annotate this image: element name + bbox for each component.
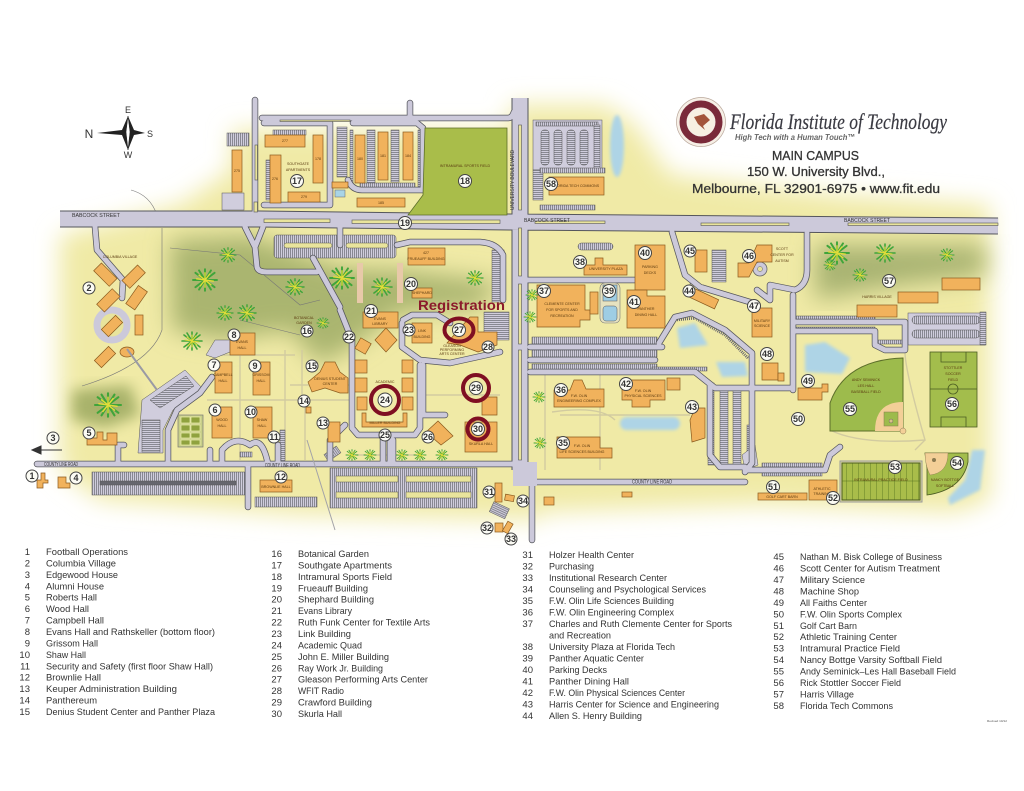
numbered building markers: 14 <box>299 396 309 406</box>
address block: Melbourne, FL 32901-6975 • www.fit.edu <box>692 181 940 196</box>
legend column 3: and Recreation <box>549 630 611 642</box>
legend column 1: 1 <box>25 547 30 558</box>
compass rose: S <box>147 129 153 139</box>
legend column 2: Crawford Building <box>298 698 372 709</box>
numbered building markers: 38 <box>575 257 585 267</box>
legend column 1: 12 <box>19 673 30 684</box>
numbered building markers: 10 <box>246 407 256 417</box>
numbered building markers: 39 <box>604 286 614 296</box>
building and field labels: SHAW <box>257 418 268 422</box>
building and field labels: LIFE SCIENCES BUILDING <box>560 450 605 454</box>
legend column 3: Allen S. Henry Building <box>549 711 642 722</box>
numbered building markers: 45 <box>685 246 695 256</box>
institute name heading: Florida Institute of Technology <box>729 109 947 134</box>
building and field labels: LIBRARY <box>372 322 388 326</box>
legend column 3: 35 <box>522 596 533 607</box>
building and field labels: MILITARY <box>754 319 771 323</box>
legend column 2: 27 <box>271 675 282 686</box>
legend column 2 <box>271 549 430 720</box>
numbered building markers: 36 <box>556 385 566 395</box>
legend column 1: 6 <box>25 604 30 615</box>
legend column 3: 37 <box>522 619 533 630</box>
legend column 2: Link Building <box>298 629 351 640</box>
building and field labels: F.W. OLIN <box>571 394 588 398</box>
legend column 4: Scott Center for Autism Treatment <box>800 564 940 574</box>
numbered building markers: 20 <box>406 279 416 289</box>
numbered building markers: 48 <box>762 349 772 359</box>
numbered building markers: 5 <box>86 428 92 438</box>
street labels: BABCOCK STREET <box>844 218 890 224</box>
building and field labels: HARRIS VILLAGE <box>862 295 892 299</box>
building and field labels: DECKS <box>644 271 657 275</box>
building and field labels: 178 <box>315 157 321 161</box>
numbered building markers: 17 <box>292 176 302 186</box>
building and field labels: HALL <box>238 346 246 350</box>
legend column 1: 13 <box>19 684 30 695</box>
numbered building markers: 33 <box>506 534 516 544</box>
legend column 3: Holzer Health Center <box>549 550 634 561</box>
numbered building markers: 27 <box>454 325 464 335</box>
numbered building markers: 32 <box>482 523 492 533</box>
legend column 1: Keuper Administration Building <box>46 684 177 695</box>
legend column 1: Panthereum <box>46 696 97 707</box>
legend column 2: John E. Miller Building <box>298 652 389 663</box>
legend column 1: Wood Hall <box>46 604 89 615</box>
numbered building markers: 28 <box>483 342 493 352</box>
building and field labels: F.W. OLIN <box>574 444 591 448</box>
legend column 1: 14 <box>19 696 30 707</box>
legend column 4: Rick Stottler Soccer Field <box>800 678 901 689</box>
numbered building markers: 16 <box>302 326 312 336</box>
numbered building markers: 53 <box>890 462 900 472</box>
legend column 2: Skurla Hall <box>298 709 342 720</box>
building and field labels: SOCCER <box>945 372 961 376</box>
building and field labels: PANTHER <box>638 307 655 311</box>
legend column 3: 36 <box>522 608 533 618</box>
numbered building markers: 1 <box>29 471 35 481</box>
numbered building markers: 4 <box>73 473 79 483</box>
legend column 3: 41 <box>522 676 533 688</box>
building and field labels: F.W. OLIN <box>635 389 652 393</box>
road network <box>37 98 998 540</box>
building and field labels: EVANS <box>374 317 387 321</box>
legend column 4: 49 <box>773 598 784 609</box>
numbered building markers: 50 <box>793 414 803 424</box>
building and field labels <box>103 139 963 499</box>
building and field labels: LES HALL <box>858 384 874 388</box>
numbered building markers: 26 <box>423 432 433 442</box>
print code footnote: Revised 10/12 <box>987 719 1007 723</box>
legend column 2: 28 <box>271 686 282 697</box>
tennis courts <box>178 415 203 447</box>
building and field labels: UNIVERSITY PLAZA <box>589 267 624 271</box>
building and field labels: 275 <box>234 169 240 173</box>
legend column 3: 31 <box>522 550 533 561</box>
legend column 2: 19 <box>271 583 282 594</box>
legend column 1: 11 <box>20 661 30 672</box>
registration label: Registration <box>418 298 505 313</box>
building and field labels: EVANS <box>236 340 249 344</box>
numbered building markers: 49 <box>803 376 813 386</box>
sports fields <box>178 128 977 502</box>
legend column 3: 39 <box>522 654 533 664</box>
legend column 2: Academic Quad <box>298 640 362 651</box>
building and field labels: CENTER <box>323 382 338 386</box>
numbered building markers: 9 <box>252 361 258 371</box>
building and field labels: ANDY SEMINICK <box>852 378 881 382</box>
legend column 4: Florida Tech Commons <box>800 701 893 712</box>
building and field labels: GRISSOM <box>253 373 269 377</box>
legend column 4: 53 <box>773 644 784 655</box>
legend column 1: Roberts Hall <box>46 593 97 604</box>
legend column 3: 33 <box>522 573 533 584</box>
building and field labels: INTRAMURAL PRACTICE FIELD <box>854 478 908 482</box>
building and field labels: 185 <box>378 201 384 205</box>
building and field labels: BASEBALL FIELD <box>851 390 881 394</box>
legend column 3: 34 <box>522 584 533 596</box>
building and field labels: 277 <box>282 139 288 143</box>
legend column 3: 44 <box>522 711 533 722</box>
numbered building markers: 40 <box>640 248 650 258</box>
walkways <box>207 350 925 470</box>
building and field labels: HALL <box>258 424 266 428</box>
building and field labels: FIELD <box>948 378 958 382</box>
legend column 1: Denius Student Center and Panther Plaza <box>46 707 216 718</box>
compass rose <box>85 105 153 160</box>
legend column 1: 15 <box>19 707 30 718</box>
street labels: COUNTY LINE ROAD <box>632 480 672 486</box>
numbered building markers: 43 <box>687 402 697 412</box>
numbered building markers: 42 <box>621 379 631 389</box>
legend column 4: Golf Cart Barn <box>800 621 857 632</box>
field 54 softball <box>925 453 968 495</box>
legend column 1: 5 <box>25 593 30 604</box>
legend column 1: Shaw Hall <box>46 650 86 661</box>
legend column 4: Nancy Bottge Varsity Softball Field <box>800 655 942 666</box>
compass rose: W <box>124 150 133 160</box>
numbered building markers: 24 <box>380 395 390 405</box>
numbered building markers: 8 <box>231 330 237 340</box>
legend column 2: 16 <box>271 549 282 560</box>
legend column 2: Ray Work Jr. Building <box>298 663 383 674</box>
arrow: to Edgewood House <box>32 446 62 454</box>
compass rose: N <box>85 127 93 141</box>
legend column 2: 23 <box>271 629 282 640</box>
legend column 3: Purchasing <box>549 562 594 572</box>
legend column 4: All Faiths Center <box>800 598 867 609</box>
legend column 1: 10 <box>19 650 30 661</box>
legend column 4: Military Science <box>800 575 865 586</box>
building and field labels: NANCY BOTTGE <box>931 478 960 482</box>
field 55 baseball <box>830 358 906 434</box>
building and field labels: CAMPBELL <box>213 373 233 377</box>
terrain background <box>60 105 990 520</box>
numbered building markers: 58 <box>546 179 556 189</box>
campus walking paths <box>127 263 403 530</box>
legend column 4: Intramural Practice Field <box>800 644 900 655</box>
building and field labels: 181 <box>380 154 386 158</box>
numbered building markers: 34 <box>518 496 528 506</box>
address block: 150 W. University Blvd., <box>747 164 885 179</box>
numbered building markers: 11 <box>269 432 279 442</box>
legend column 3: F.W. Olin Physical Sciences Center <box>549 688 685 699</box>
legend column 3: University Plaza at Florida Tech <box>549 642 675 653</box>
building and field labels: FOR SPORTS AND <box>546 308 578 312</box>
field 18 intramural sports <box>408 128 507 215</box>
numbered building markers: 54 <box>952 458 962 468</box>
building and field labels: ARTS CENTER <box>439 352 465 356</box>
legend column 2: Intramural Sports Field <box>298 572 392 583</box>
numbered building markers: 15 <box>307 361 317 371</box>
legend column 2: 26 <box>271 663 282 674</box>
legend column 3: 32 <box>522 562 533 572</box>
legend column 2: Frueauff Building <box>298 583 368 594</box>
legend column 1: Evans Hall and Rathskeller (bottom floor) <box>46 627 215 638</box>
legend column 4 <box>773 552 956 712</box>
numbered building markers: 13 <box>318 418 328 428</box>
numbered building markers: 25 <box>380 430 390 440</box>
legend column 2: Ruth Funk Center for Textile Arts <box>298 618 430 629</box>
legend column 3: Parking Decks <box>549 665 607 676</box>
legend column 3: Harris Center for Science and Engineering <box>549 700 719 710</box>
legend column 4: 56 <box>773 678 784 689</box>
numbered building markers: 56 <box>947 399 957 409</box>
legend column 2: 17 <box>271 560 282 571</box>
numbered building markers: 22 <box>344 332 354 342</box>
building and field labels: CENTER FOR <box>770 253 794 257</box>
building and field labels: 180 <box>357 157 363 161</box>
tagline: High Tech with a Human Touch™ <box>735 132 855 142</box>
street labels: UNIVERSITY BOULEVARD <box>510 150 516 210</box>
legend column 3: Charles and Ruth Clemente Center for Sports <box>549 619 732 630</box>
building and field labels: HALL <box>218 379 228 383</box>
building and field labels: 276 <box>272 177 278 181</box>
legend column 4: 50 <box>773 609 784 620</box>
building and field labels: WOOD <box>216 418 228 422</box>
building and field labels: APARTMENTS <box>286 168 311 172</box>
legend column 2: 21 <box>271 606 282 617</box>
building and field labels: BUILDING <box>414 335 431 339</box>
numbered building markers: 3 <box>50 433 56 443</box>
street labels: BABCOCK STREET <box>524 218 570 224</box>
numbered building markers: 2 <box>86 283 92 293</box>
building and field labels: TRAINING <box>813 492 831 496</box>
legend column 2: 22 <box>271 618 282 629</box>
building and field labels: STOTTLER <box>944 366 963 370</box>
legend column 2: 25 <box>271 652 282 663</box>
registration red rings <box>371 318 489 440</box>
numbered building markers: 21 <box>366 306 376 316</box>
legend column 1: 8 <box>25 627 30 638</box>
building and field labels: BOTANICAL <box>294 316 314 320</box>
legend column 4: Machine Shop <box>800 586 859 597</box>
building and field labels: FLORIDA TECH COMMONS <box>553 184 600 188</box>
water features <box>610 115 985 505</box>
legend column 4: 58 <box>773 701 784 712</box>
numbered building markers: 41 <box>629 297 639 307</box>
building and field labels: RECREATION <box>550 314 574 318</box>
legend column 4: 52 <box>773 632 784 643</box>
building and field labels: MILLER BUILDING <box>370 421 401 425</box>
palm trees <box>95 242 954 460</box>
building and field labels: INTRAMURAL SPORTS FIELD <box>440 164 490 168</box>
building and field labels: GOLF CART BARN <box>766 495 798 499</box>
numbered building markers: 29 <box>471 383 481 393</box>
numbered building markers <box>26 174 964 545</box>
legend column 4: Nathan M. Bisk College of Business <box>800 552 942 563</box>
legend column 2: Evans Library <box>298 606 352 617</box>
legend column 3: 43 <box>522 700 533 710</box>
legend column 2: 24 <box>271 640 282 651</box>
numbered building markers: 52 <box>828 493 838 503</box>
building and field labels: PERFORMING <box>440 348 464 352</box>
numbered building markers: 47 <box>749 301 759 311</box>
legend column 3: 38 <box>522 642 533 653</box>
legend column 3: 42 <box>522 688 533 699</box>
building and field labels: ACADEMIC <box>376 380 395 384</box>
street labels: BABCOCK STREET <box>72 213 120 219</box>
legend column 2: 20 <box>271 595 282 606</box>
legend column 2: 18 <box>271 572 282 583</box>
legend column 2: Gleason Performing Arts Center <box>298 675 428 686</box>
legend column 4: 46 <box>773 564 784 574</box>
legend column 1: Football Operations <box>46 547 128 558</box>
building and field labels: SOFTBALL <box>936 484 954 488</box>
legend column 2: WFIT Radio <box>298 686 344 697</box>
legend column 1: Brownlie Hall <box>46 673 101 684</box>
legend column 3 <box>522 550 732 722</box>
legend column 4: 54 <box>773 655 784 666</box>
legend column 1: 3 <box>25 570 30 581</box>
legend column 3: 40 <box>522 665 533 676</box>
building and field labels: SKURLA HALL <box>469 442 493 446</box>
legend column 2: 30 <box>271 709 282 720</box>
legend column 1 <box>19 547 216 718</box>
numbered building markers: 19 <box>400 218 410 228</box>
parking lots <box>92 120 986 519</box>
legend column 1: 7 <box>25 616 30 627</box>
legend column 4: 45 <box>773 552 784 563</box>
building and field labels: ATHLETIC <box>813 487 831 491</box>
southgate pool <box>335 190 345 197</box>
legend column 4: 51 <box>773 621 784 632</box>
legend column 3: F.W. Olin Life Sciences Building <box>549 596 674 607</box>
address block: MAIN CAMPUS <box>772 148 859 163</box>
building and field labels: 427 <box>423 251 429 255</box>
legend column 4: 55 <box>773 667 784 678</box>
numbered building markers: 30 <box>473 424 483 434</box>
building and field labels: GARDEN <box>296 321 312 325</box>
building and field labels: SCIENCE <box>754 324 771 328</box>
street labels <box>44 150 890 485</box>
numbered building markers: 55 <box>845 404 855 414</box>
building and field labels: 184 <box>405 154 411 158</box>
road medians <box>254 120 998 460</box>
compass rose: E <box>125 105 131 115</box>
legend column 4: Athletic Training Center <box>800 632 897 643</box>
building and field labels: LINK <box>418 329 427 333</box>
numbered building markers: 51 <box>768 482 778 492</box>
building and field labels: PHYSICAL SCIENCES <box>624 394 662 398</box>
legend column 1: Grissom Hall <box>46 638 98 649</box>
building and field labels: BROWNLIE HALL <box>261 485 291 489</box>
street labels: COUNTY LINE ROAD <box>44 462 78 468</box>
building and field labels: SHEPHARD <box>412 291 432 295</box>
field 53 football <box>840 461 922 502</box>
building and field labels: HALL <box>218 424 226 428</box>
legend column 2: Southgate Apartments <box>298 560 392 571</box>
building and field labels: COLUMBIA VILLAGE <box>103 255 138 259</box>
legend column 3: F.W. Olin Engineering Complex <box>549 608 674 618</box>
legend column 3: Panther Aquatic Center <box>549 654 644 664</box>
legend column 1: Columbia Village <box>46 558 116 569</box>
numbered building markers: 23 <box>404 325 414 335</box>
legend column 3: Panther Dining Hall <box>549 676 629 688</box>
legend column 1: Edgewood House <box>46 570 118 581</box>
address block <box>692 148 940 196</box>
institute seal logo <box>676 98 726 146</box>
buildings <box>37 132 980 534</box>
street labels: COUNTY LINE ROAD <box>265 463 300 469</box>
legend column 2: Shephard Building <box>298 595 374 606</box>
building and field labels: SOUTHGATE <box>287 162 310 166</box>
legend column 2: 29 <box>271 698 282 709</box>
numbered building markers: 37 <box>539 286 549 296</box>
legend column 1: 9 <box>25 638 30 649</box>
legend column 2: Botanical Garden <box>298 549 369 560</box>
legend column 4: 48 <box>773 586 784 597</box>
numbered building markers: 12 <box>276 472 286 482</box>
legend column 3: Counseling and Psychological Services <box>549 584 706 596</box>
pool 39 <box>600 283 620 323</box>
building and field labels: AUTISM <box>775 259 789 263</box>
field 56 soccer <box>930 352 977 427</box>
building and field labels: PARKING <box>642 265 658 269</box>
legend column 4: F.W. Olin Sports Complex <box>800 609 902 620</box>
building and field labels: DINING HALL <box>635 313 657 317</box>
legend column 1: Alumni House <box>46 581 104 592</box>
legend column 4: Andy Seminick–Les Hall Baseball Field <box>800 667 956 678</box>
legend column 4: 57 <box>773 690 784 700</box>
legend column 4: Harris Village <box>800 690 854 700</box>
numbered building markers: 18 <box>460 176 470 186</box>
numbered building markers: 44 <box>684 286 694 296</box>
numbered building markers: 57 <box>884 276 894 286</box>
legend column 1: 4 <box>25 581 30 592</box>
legend column 4: 47 <box>773 575 784 586</box>
legend column 3: Institutional Research Center <box>549 573 667 584</box>
legend column 1: Campbell Hall <box>46 616 104 627</box>
building and field labels: DENIUS STUDENT <box>314 377 347 381</box>
building and field labels: ENGINEERING COMPLEX <box>557 399 601 403</box>
legend column 1: 2 <box>25 558 30 569</box>
building and field labels: CLEMENTE CENTER <box>544 302 580 306</box>
numbered building markers: 31 <box>484 487 494 497</box>
numbered building markers: 46 <box>744 251 754 261</box>
building and field labels: FRUEAUFF BUILDING <box>407 257 445 261</box>
building and field labels: HALL <box>256 379 266 383</box>
building and field labels: SCOTT <box>776 247 789 251</box>
building and field labels: 279 <box>301 195 307 199</box>
legend column 1: Security and Safety (first floor Shaw Hall) <box>46 661 213 672</box>
numbered building markers: 6 <box>212 405 218 415</box>
numbered building markers: 35 <box>558 438 568 448</box>
building and field labels: GLEASON <box>443 344 461 348</box>
numbered building markers: 7 <box>211 360 217 370</box>
